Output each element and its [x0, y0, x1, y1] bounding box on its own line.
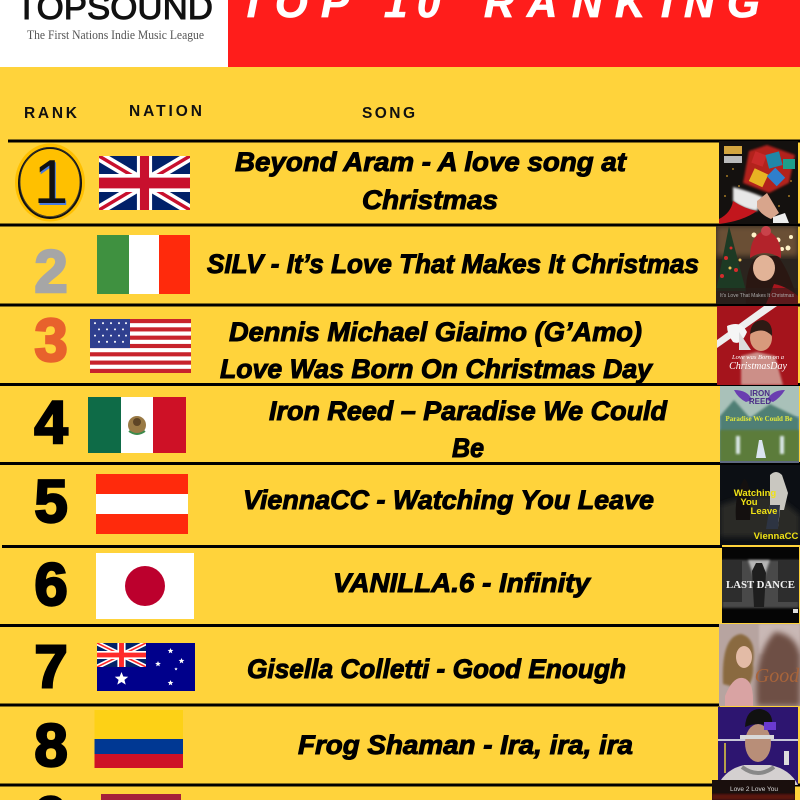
header: nation: NATION [129, 103, 202, 120]
flag: Austria [96, 474, 188, 534]
cover 5: Watching [734, 488, 776, 499]
song 1: Christmas [362, 185, 498, 215]
header: song: SONG [362, 105, 415, 122]
cover 4 [720, 386, 799, 463]
song 8: Frog Shaman - Ira, ira, ira [298, 730, 633, 760]
cover 7: Good [755, 665, 800, 687]
cover 5: Leave [751, 506, 777, 517]
row 7 [34, 624, 800, 706]
cover 3: Love was Born on a [731, 354, 784, 361]
row 5 [34, 465, 800, 545]
cover 6 [722, 547, 799, 623]
cover 5 [720, 465, 800, 545]
song 6: VANILLA.6 - Infinity [333, 568, 592, 598]
cover 8 [718, 707, 798, 785]
rank badge 1: 1 [35, 150, 69, 219]
cover 9 [712, 780, 795, 800]
song 1: Beyond Aram - A love song at [235, 147, 627, 177]
cover 2: It's Love That Makes It Christmas [720, 293, 794, 299]
song 7: Gisella Colletti - Good Enough [247, 654, 626, 684]
row 6 [34, 547, 799, 623]
flag: row 9 [101, 794, 181, 800]
song 3: Dennis Michael Giaimo (G’Amo) [229, 317, 642, 347]
logo tagline: The First Nations Indie Music League [27, 28, 204, 42]
rank 4: 4 [34, 389, 68, 456]
cover 3: ChristmasDay [729, 361, 787, 372]
song 2: SILV - It’s Love That Makes It Christmas [207, 249, 699, 279]
cover 1 [719, 141, 798, 224]
cover 4: IRON [750, 389, 770, 398]
rank badge 1 [15, 144, 85, 222]
flag: Australia [97, 643, 195, 691]
rank 8: 8 [34, 712, 68, 779]
rank 3: 3 [34, 307, 68, 374]
row 4 [34, 386, 799, 463]
rank badge 1: 1 [34, 148, 68, 217]
cover 5: You [740, 497, 758, 508]
flag: Mexico [88, 397, 186, 453]
flag: Japan [96, 553, 194, 619]
cover 2 [716, 226, 798, 304]
cover 7 [719, 624, 800, 706]
rank 5: 5 [34, 468, 68, 535]
flag: United Kingdom [99, 156, 190, 210]
cover 9: Love 2 Love You [730, 786, 778, 793]
song 5: ViennaCC - Watching You Leave [243, 485, 654, 515]
rank 6: 6 [34, 551, 68, 618]
flag: Colombia [94, 710, 183, 768]
song 3: Love Was Born On Christmas Day [220, 354, 654, 384]
song 4: Iron Reed – Paradise We Could [269, 396, 668, 426]
row 1 [15, 141, 798, 224]
cover 4: Paradise We Could Be [726, 415, 792, 423]
cover 6: LAST DANCE [726, 580, 795, 591]
flag: United States [90, 319, 191, 373]
row 2 [34, 226, 798, 305]
column headers [24, 103, 415, 122]
song 4: Be [452, 433, 484, 463]
cover 3 [717, 306, 798, 385]
logo panel [0, 0, 228, 67]
flag: Italy [97, 235, 190, 294]
rank 2: 2 [34, 238, 68, 305]
cover 4: REED [749, 397, 771, 406]
row 8 [34, 707, 798, 785]
rank 7: 7 [34, 633, 68, 700]
row 9 (cropped) [34, 780, 795, 800]
header: rank: RANK [24, 105, 78, 122]
row 3 [34, 306, 798, 385]
title banner [228, 0, 800, 67]
cover 5: ViennaCC [754, 531, 798, 542]
